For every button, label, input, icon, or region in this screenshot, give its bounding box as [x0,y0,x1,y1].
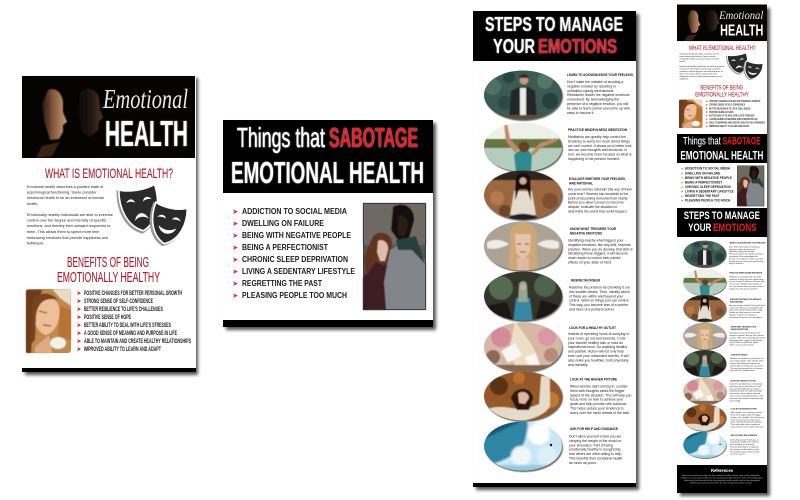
list: benefits: BETTER RESILIENCE TO LIFE'S CHALLENGES [84,306,163,313]
section: steps (miniature): and more of a problem-solver. [730,369,756,372]
step 2 text: we can't control. It allows us to better look [568,144,632,148]
section: steps (miniature): into smaller details. Then, identify which [730,360,763,363]
step 5 text: of these are within and beyond your [569,294,624,298]
step 2 text: into our own thoughts and emotions. In [568,148,627,152]
step 3 text: point of becoming removed from reality. [568,196,628,200]
header photo of couple in shadow [22,76,195,158]
step 1 text: Resistance leaves the negative emotions [567,93,630,97]
step 2 text: turn, we become more focused on what is [568,153,632,157]
section: emotional health (miniature): Emotional [718,8,764,22]
section: steps (miniature): negative emotions, like any skill, requires [730,334,764,337]
section: steps (miniature): goals and help provide new solutions. [731,421,763,424]
section: emotional health (miniature): Emotionally healthy individuals are able to exercise [680,65,724,68]
step 5 text: Redefine the problem by chunking it out [569,286,630,290]
step 6 text: Instead of spending hours of worrying in [568,332,629,336]
footer: references: References and source links for the emotional health articles cited in this infographic [682,474,760,477]
section: steps (miniature): we can't control. It allows us to better look [730,280,764,283]
section: steps (miniature): When worries start coming in, counter [731,411,763,414]
heading: benefits [57,255,160,286]
step 3 text: come true? Worries can snowball to the [568,192,628,196]
section: steps (miniature): carrying the weight of the world on [730,441,759,444]
step 2 text: tendency to worry too much about things [568,139,630,143]
text block: definition [27,185,113,246]
section: steps (miniature): that others are often willing to help. [730,448,760,451]
step 1 text: presence of a negative emotion, you will [567,102,628,106]
section: steps (miniature): identifying those triggers, it will become [730,339,762,342]
step 4 text: NEGATIVE EMOTIONS [570,231,603,235]
icon: theatre masks [117,184,188,248]
text block: definition: them. This allows them to spend more time [27,230,99,234]
step 7 text: focus more on how to achieve your [570,398,624,402]
list: benefits: A GOOD SENSE OF MEANING AND PURPOSE IN LIFE [84,330,177,337]
section: steps (miniature): NEGATIVE EMOTIONS [731,328,749,331]
text block: definition: Emotionally healthy individuals are able to exercise [27,213,113,217]
list: sabotage factors: BEING WITH NEGATIVE PEOPLE [242,230,351,240]
step 1 text: negative emotion by resorting to [567,84,616,88]
list: sabotage factors: REGRETTING THE PAST [242,278,323,288]
section: steps (miniature): ASK FOR HELP AND GUIDANCE [731,434,758,437]
section: steps (miniature): tendency to worry too much about things [730,278,764,281]
photo: angry woman with steam from ears [483,220,563,272]
section: sabotage (miniature): SABOTAGE [722,136,761,147]
section: steps (miniature): EVALUATE WHETHER YOUR FEELINGS [730,298,762,301]
title: things that sabotage emotional health: Things that [237,122,325,153]
section: emotional health (miniature): STRONG SENSE OF SELF-CONFIDENCE [709,103,745,107]
step 6 text: inspirational book. Do anything healthy [568,345,627,349]
section: steps (miniature): emotionally healthy is recognizing [730,445,758,448]
step 3 text: Are your worries rational? Did any of them [568,188,632,192]
step 5 text: control. Work on things you can control. [569,299,629,303]
step 4 text: effects on your state of mind. [568,260,612,264]
photo: figure in dark forest [483,270,563,322]
step 4 text [568,227,632,264]
section: steps (miniature): ARE RATIONAL [730,301,744,304]
section: emotional health (miniature): emotions, and thereby their outward responses to [680,70,723,73]
list: benefits: POSITIVE CHANGES FOR BETTER PERSONAL GROWTH [84,290,182,297]
list: benefits [77,290,191,353]
step 7 text: This helps reduce your tendency to [570,406,624,410]
section: steps (miniature): focus more on how to achieve your [731,418,760,421]
section: steps (miniature): Redefine the problem by chunking it out [730,357,764,360]
section: steps (miniature): Are your worries rational? Did any of them [730,304,765,307]
section: steps (miniature): This way, you become less of a worrier [730,367,763,370]
section: steps (miniature): LEARN TO ACKNOWLEDGE YOUR FEELINGS [729,242,766,245]
step 1 text: ways to resolve it. [567,111,594,115]
section: steps (miniature): This benefits their emotional health [730,450,759,453]
section: steps (miniature): REDEFINE THE PROBLEM [731,354,748,356]
section: emotional health (miniature): BETTER ABILITY TO DEAL WITH LIFE'S STRESSES [709,114,754,117]
section: emotional health (miniature): psychological functioning. Some consider [680,55,716,58]
step 8 text: carrying the weight of the world on [569,439,621,443]
section: steps (miniature): Before you allow concern to become [730,311,760,314]
section: steps (miniature): of these are within and beyond your [730,362,760,365]
section: sabotage (miniature): DWELLING ON FAILURE [685,171,721,175]
section: steps (miniature): your favorite healthy dish or read an [730,387,760,390]
section: emotional health (miniature): POSITIVE CHANGES FOR BETTER PERSONAL GROWTH [709,99,760,103]
photo: roses and notes [483,321,563,373]
list: sabotage factors: CHRONIC SLEEP DEPRIVATION [242,254,348,264]
section: steps (miniature): them with thoughts about the bigger [731,414,761,416]
step 3 text: Before you allow concern to become [568,201,624,205]
step 6 text: even one your unfounded worries. It will [568,354,629,358]
step 1 text [567,73,634,115]
text block: definition: control over the degree and intensity of specific [27,218,106,222]
section: steps (miniature): ways to resolve it. [729,262,744,265]
section: emotional health (miniature): EMOTIONALLY HEALTHY [695,92,749,98]
step 3 text: determine the worst that could happen. [568,210,627,214]
section: sabotage (miniature): CHRONIC SLEEP DEPRIVATION [685,185,731,189]
section: steps (miniature): come true? Worries can snowball to the [730,306,763,309]
section: steps (miniature): LOOK AT THE BIGGER PICTURE [731,407,757,410]
text block: definition: emotional health to be an extension of mental [27,196,104,200]
photo: blue sky with planet [483,420,563,472]
section: sabotage (miniature): ADDICTION TO SOCIAL MEDIA [685,167,731,171]
panel: steps to manage your emotions [473,11,639,490]
section: sabotage (miniature): LIVING A SEDENTARY LIFESTYLE [685,190,734,193]
step 8 text: Don't allow yourself to feel you are [569,434,622,438]
section: emotional health (miniature): embracing emotions that provide happiness and [680,75,721,78]
section: sabotage (miniature): BEING WITH NEGATIVE PEOPLE [685,176,733,180]
text block: definition: Emotional health describes a positive state of [27,185,104,189]
section: steps (miniature): determine the worst that could happen. [730,316,763,319]
section: steps (miniature): Resistance leaves the negative emotions [729,253,763,256]
step 6 text: LOOK FOR A HEALTHY OUTLET [569,326,617,330]
section: steps (miniature): This helps reduce your tendency to [731,423,760,426]
text block: definition: emotions, and thereby their outward responses to [27,224,110,228]
step 6 text: also make you healthier, both physically [568,358,629,362]
section: emotional health (miniature): Emotional health describes a positive state of [680,53,720,55]
section: steps (miniature): negative emotion by resorting to [729,248,756,251]
step 4 text: much easier to control their painful [568,256,621,260]
section: steps (miniature): presence of a negative emotion, you will [729,257,763,260]
section: steps (miniature): and mentally. [730,399,741,402]
section: steps (miniature): LOOK FOR A HEALTHY OUTLET [730,379,757,382]
step 4 text: KNOW WHAT TRIGGERS YOUR [570,227,616,231]
step 7 text: LOOK AT THE BIGGER PICTURE [570,378,618,382]
text block: definition: health. [27,202,38,206]
step 6 text [568,326,629,367]
section: emotional health (miniature): A GOOD SENSE OF MEANING AND PURPOSE IN LIFE [709,117,758,121]
step 8 text: that others are often willing to help. [569,452,622,456]
step 8 text: This benefits their emotional health [569,456,622,460]
section: steps (miniature): EMOTIONS [713,222,757,234]
title: steps to manage your emotions [485,13,623,58]
section: steps (miniature): happening in the present moment. [730,287,759,290]
step 1 text: unhealthy coping mechanisms. [567,89,614,93]
title: Emotional Health: HEALTH [105,113,188,154]
section: steps (miniature): practice. When you do develop that skill of [730,336,765,339]
section: steps (miniature): STEPS TO MANAGE [684,210,760,222]
step 2 text: Meditation can greatly help control the [568,135,626,139]
section: steps (miniature): and positive. Action will not only help [730,392,760,395]
section: steps (miniature): into our own thoughts and emotions. In [730,283,762,286]
section: emotional health (miniature): health. [680,60,686,63]
section: steps (miniature): unhealthy coping mechanisms. [729,250,755,253]
section: steps (miniature): control. Work on things you can control. [730,364,764,367]
step 3 text: EVALUATE WHETHER YOUR FEELINGS [569,177,626,181]
step 3 text: despair, evaluate the situation to [568,205,617,209]
section: emotional health (miniature): control over the degree and intensity of specific [680,68,721,70]
step 4 text: negative emotions, like any skill, requires [568,243,631,247]
panel: things that sabotage [223,120,436,330]
section: steps (miniature): aspect of the situation. This will help you [731,416,764,419]
step 5 text [569,278,630,312]
section: steps (miniature): Don't allow yourself to feel you are [730,438,759,441]
text block: definition: embracing emotions that provide happiness and [27,236,108,240]
section: emotional health (miniature): fulfillment. [680,78,689,81]
title: steps to manage your emotions: EMOTIONS [538,35,617,58]
section: steps (miniature): your shoulders. Part of being [730,443,754,446]
step 1 text: LEARN TO ACKNOWLEDGE YOUR FEELINGS [567,73,634,77]
photo: woman lying in autumn leaves [483,370,563,423]
section: emotional health (miniature): BENEFITS OF BEING [700,85,743,92]
section: steps (miniature): point of becoming removed from reality. [730,309,763,312]
step 2 text [568,128,632,161]
heading: benefits: EMOTIONALLY HEALTHY [57,270,160,286]
section: sabotage (miniature): PLEASING PEOPLE TOO MUCH [685,199,731,203]
heading: what is emotional health: WHAT IS EMOTIONAL HEALTH? [45,165,173,181]
step 7 text: worry over the minor details of the task. [570,411,630,415]
footer: references: References and source links for the emotional health articles [690,482,752,484]
step 8 text: as much as yours. [569,461,597,465]
section: steps (miniature): unresolved. By acknowledging the [729,255,758,258]
heading: benefits: BENEFITS OF BEING [67,255,149,271]
step 8 text: emotionally healthy is recognizing [569,448,620,452]
title: things that sabotage emotional health: EMOTIONAL HEALTH [231,155,424,190]
footer: references: References and source links for the emotional health articles cited in this infographic [684,479,760,482]
step 6 text: your favorite healthy dish or read an [568,341,623,345]
step 8 text: your shoulders. Part of being [569,443,613,447]
section: steps (miniature): Don't make the mistake of avoiding a [729,245,761,248]
section: steps (miniature): much easier to control their painful [730,341,759,344]
step 2 text: PRACTICE MINDFULNESS MEDITATION [568,128,628,132]
section: steps (miniature): KNOW WHAT TRIGGERS YOUR [731,325,757,328]
list: benefits: STRONG SENSE OF SELF-CONFIDENCE [84,298,153,305]
list: sabotage factors: BEING A PERFECTIONIST [242,242,329,252]
section: steps (miniature): Instead of spending hours of worrying in [730,383,763,386]
section: emotional health (miniature): WHAT IS EMOTIONAL HEALTH? [689,45,756,52]
section: emotional health (miniature): emotional health to be an extension of mental [680,58,720,60]
step 4 text: practice. When you do develop that skill of [568,247,632,251]
section: steps (miniature): effects on your state of mind. [730,344,754,347]
section: steps (miniature): YOUR [688,222,711,234]
step 6 text: your room, go out and exercise. Cook [568,336,626,340]
section: steps (miniature): Meditation can greatly help control the [730,275,761,278]
title: Emotional Health [102,84,188,154]
section: emotional health (miniature): IMPROVED ABILITY TO LEARN AND ADAPT [709,124,749,128]
section: steps (miniature): inspirational book. Do anything healthy [730,390,762,393]
step 5 text: into smaller details. Then, identify which [569,290,630,294]
section: steps (miniature) [683,210,766,459]
section: steps (miniature): turn, we become more focused on what is [730,285,765,288]
step 6 text: and mentally. [568,363,588,367]
panel: emotional health poster [22,76,198,375]
photo: smiling woman with flower [26,289,71,353]
step 5 text: REDEFINE THE PROBLEM [571,278,600,282]
step 4 text: identifying those triggers, it will become [568,252,628,256]
step 1 text: be able to learn control and come up with [567,106,630,110]
list: benefits: POSITIVE SENSE OF HOPE [84,314,131,321]
step 2 text: happening in the present moment. [568,157,620,161]
section: steps (miniature): even one your unfounded worries. It will [730,395,763,398]
section: steps (miniature): be able to learn control and come up with [729,260,764,263]
step 5 text: This way, you become less of a worrier [569,303,629,307]
section: emotional health (miniature): BETTER RESILIENCE TO LIFE'S CHALLENGES [709,107,750,110]
section: steps (miniature): your room, go out and exercise. Cook [730,385,761,388]
step 3 text: ARE RATIONAL [569,181,593,185]
step 8 text: ASK FOR HELP AND GUIDANCE [570,427,619,431]
photo: woman sitting in leaves [483,169,563,221]
step 1 text: Don't make the mistake of avoiding a [567,80,623,84]
list: benefits: ABLE TO MAINTAIN AND CREATE HEALTHY RELATIONSHIPS [84,338,191,345]
list: sabotage factors: PLEASING PEOPLE TOO MUCH [242,290,347,300]
footer: references: References [711,468,733,473]
footer: references: References and source links for the emotional health articles cited in this infographic [681,476,763,480]
photo: couple leaning together [363,203,426,310]
step 1 text: unresolved. By acknowledging the [567,98,619,102]
section: sabotage (miniature): BEING A PERFECTIONIST [685,181,723,184]
step 8 text [569,427,622,465]
photo: woman with raised arms at lake [483,121,563,173]
step 3 text [568,177,632,214]
step 4 text: Identifying exactly what triggers your [568,238,624,242]
step 6 text: and positive. Action will not only help [568,350,624,354]
title: steps to manage your emotions: YOUR [493,35,535,58]
step 5 text: and more of a problem-solver. [569,308,615,312]
section: steps (miniature): PRACTICE MINDFULNESS MEDITATION [730,272,763,275]
panel: combined full-length infographic [677,4,770,496]
section: steps (miniature): Identifying exactly what triggers your [730,332,760,335]
section: steps (miniature): also make you healthier, both physically [730,397,763,400]
title: things that sabotage emotional health: SABOTAGE [329,122,418,153]
step 7 text [570,378,632,415]
photo: man in forest [483,69,563,121]
title: Emotional Health: Emotional [102,84,188,114]
section: sabotage (miniature): Things that [683,136,721,147]
title: things that sabotage emotional health [231,122,424,190]
section: emotional health (miniature): POSITIVE SENSE OF HOPE [709,110,734,114]
list: sabotage factors: LIVING A SEDENTARY LIFESTYLE [242,266,355,276]
step 7 text: goals and help provide new solutions. [570,402,627,406]
section: steps (miniature): despair, evaluate the situation to [730,314,757,316]
section: steps (miniature): as much as yours. [730,453,746,456]
list: sabotage factors: ADDICTION TO SOCIAL MEDIA [242,206,347,216]
section: emotional health (miniature): them. This allows them to spend more time [680,73,717,75]
list: benefits: IMPROVED ABILITY TO LEARN AND ADAPT [84,346,161,353]
list: benefits: BETTER ABILITY TO DEAL WITH LIFE'S STRESSES [84,322,171,329]
section: steps (miniature): worry over the minor details of the task. [731,425,764,428]
text block: definition: fulfillment. [27,242,44,246]
step 7 text: aspect of the situation. This will help you [570,393,632,397]
section: sabotage (miniature) [680,136,764,206]
list: sabotage factors [233,206,355,300]
step 7 text: them with thoughts about the bigger [570,389,626,393]
list: sabotage factors: DWELLING ON FAILURE [242,218,324,228]
footer: references [677,465,767,493]
title: steps to manage your emotions: STEPS TO MANAGE [485,13,623,36]
step 7 text: When worries start coming in, counter [570,384,629,388]
section: sabotage (miniature): REGRETTING THE PAST [685,194,720,198]
section: emotional health (miniature): HEALTH [720,21,763,39]
section: emotional health (miniature) [677,4,767,128]
text block: definition: psychological functioning. Some consider [27,190,97,194]
